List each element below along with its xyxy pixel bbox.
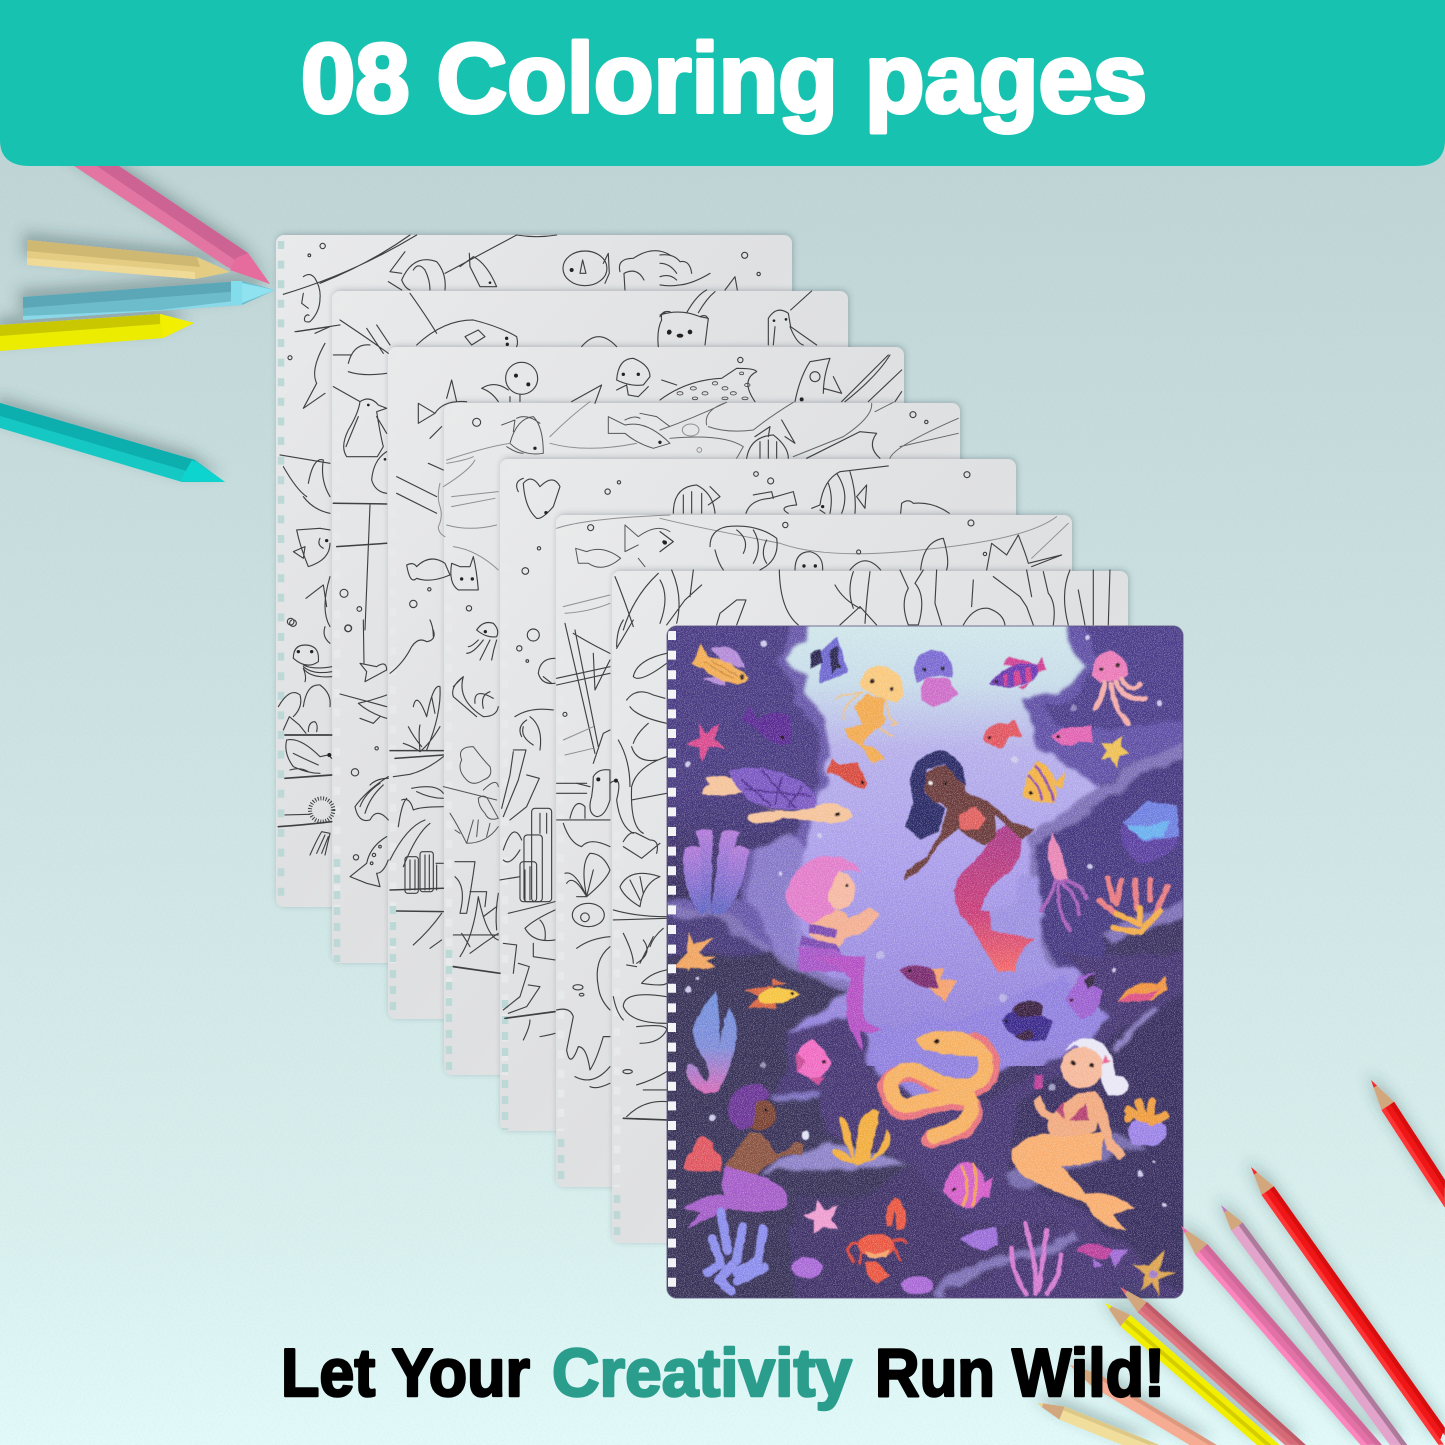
tagline: Creativity [552,1335,852,1411]
icon: dark purple fish [741,706,791,744]
cover grain [667,626,1183,1298]
icon: yellow fish [743,979,800,1009]
icon: orange star tips [687,957,716,972]
icon: lavender coral [707,1212,765,1291]
cover: colored mermaid scene [660,620,1197,1312]
icon: pink kelp [1012,1224,1061,1295]
tagline: Run [875,1335,995,1411]
icon: blue giant clam [1120,801,1179,863]
cover sky backdrop [760,626,1100,1066]
icon: orange starfish [674,931,716,968]
colored pencils: bottom-right group [1034,1076,1445,1445]
pencil: cream [1034,1397,1159,1445]
crayon: light blue [23,281,275,320]
icon: striped purple fish [990,657,1047,689]
line art: upper-right page strips [660,252,1110,625]
icon: violet fish [1066,972,1103,1019]
icon: dark-haired mermaid [904,750,1035,972]
spiral holes on pages [281,241,617,1241]
crayon: pink [65,160,270,284]
crayon: cream [27,240,230,279]
icon: pink round fish [943,1161,993,1208]
pencil: peach [1066,1359,1217,1445]
icon: dark navy fish [1001,1000,1052,1041]
icon: yellow starfish [1100,736,1130,768]
cover edge [667,626,1183,1298]
icon: gold starfish [1132,1249,1176,1297]
page 3 [388,347,904,1019]
cover illustrations: upper half [674,635,1179,972]
icon: pink starfish lower [803,1199,838,1234]
icon: shells [792,1257,934,1295]
icon: moray eel [886,1031,991,1139]
icon: magenta fish [1051,725,1093,746]
icon: purple fish blurred [960,1227,998,1251]
line art: lower-left page strips [278,620,667,1120]
icon: mermaid tail lower [809,957,881,1051]
icon: squid [1040,833,1086,931]
icon: orange branching coral [1099,879,1167,933]
icon: orange anemone [1128,1102,1167,1146]
page 1 [276,235,792,907]
bubbles: upper [685,635,1163,959]
page 4 [444,403,960,1075]
icon: pink-haired mermaid upper [785,856,880,972]
tagline: Wild! [1012,1335,1165,1411]
cover illustrations: lower half [683,957,1176,1297]
icon: blue-pink kelp [686,990,737,1094]
icon: yellow coral [832,1110,891,1164]
icon: magenta fish lower [1076,1243,1128,1268]
page 5 [500,459,1016,1131]
title: 08 Coloring pages [301,23,1147,133]
page 7 [612,571,1128,1243]
crayons: top-left group [0,160,275,482]
icon: blue angelfish [810,637,848,684]
pencil: pink [1175,1221,1382,1445]
icon: maroon fish [899,965,957,1001]
icon: purple jellyfish [914,650,957,707]
icon: yellow jellyfish [836,666,903,764]
icon: coral-red fish [983,720,1022,748]
tagline: Let Your [281,1335,530,1411]
icon: red fish [826,758,867,789]
pencil: mauve [1215,1201,1407,1445]
icon: pink starfish [686,723,725,762]
pencil: red [1245,1163,1445,1445]
line art: upper-left page strips [280,235,671,632]
rocks: upper half [660,620,1197,972]
rocks: lower half [660,955,1197,1312]
banner: top teal header [0,0,1445,166]
icon: orange-pink fish [1118,975,1167,1002]
icon: pink fish [796,1038,832,1086]
page 2 [332,291,848,963]
icon: orange fish [692,644,749,686]
crayon: yellow [0,314,194,351]
icon: sea turtle [702,768,853,823]
icon: grandmother mermaid [1012,1038,1135,1230]
icon: purple tube coral [683,829,749,914]
pencil: rose [1115,1282,1306,1445]
cover: spiral holes [668,631,676,1296]
icon: red coral [684,1136,722,1171]
icon: striped yellow fish [1022,761,1065,803]
crayon: teal [0,403,225,482]
coloring pages: stacked outline sheets [276,235,1128,1243]
page 6 [556,515,1072,1187]
pencil: red far right [1365,1076,1445,1207]
pencil: yellow [1100,1297,1280,1445]
icon: pink jellyfish [1093,651,1146,723]
tagline [281,1335,1165,1411]
bubbles: lower [685,968,1167,1207]
icon: red crab [848,1197,906,1284]
icon: young mermaid [683,1084,810,1229]
